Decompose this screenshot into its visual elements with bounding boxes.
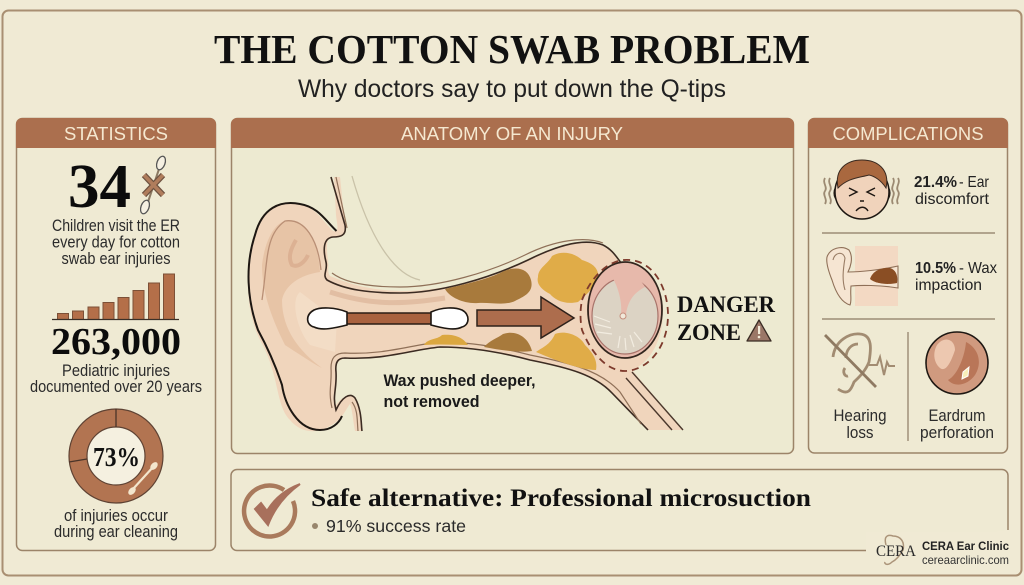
text: children description: every day for cotton	[52, 234, 180, 252]
title: THE COTTON SWAB PROBLEM	[214, 26, 810, 72]
bar chart	[52, 274, 179, 320]
text: pediatric description: documented over 20 years	[30, 378, 202, 396]
eardrum	[588, 262, 662, 358]
heading: complications	[808, 118, 1008, 148]
panel: complications	[808, 118, 1008, 453]
text: success rate: 91% success rate	[326, 516, 466, 536]
panel: anatomy of an injury	[231, 118, 794, 454]
icon: eardrum perforation	[926, 332, 988, 394]
icon: hearing loss	[825, 334, 895, 392]
arrow: pushing direction	[477, 297, 574, 338]
text: pediatric description: Pediatric injuries	[62, 362, 170, 380]
text: hearing loss: Hearing	[834, 407, 886, 425]
donut chart: 73%: 73%	[93, 442, 140, 472]
icon: warning triangle	[747, 320, 771, 341]
text: hearing loss: loss	[846, 424, 874, 442]
donut chart: 73%	[69, 409, 163, 503]
canal walls	[324, 177, 622, 293]
logo: CERA Ear Clinic: CERA	[876, 543, 916, 560]
panel: statistics	[16, 118, 216, 550]
text: ear discomfort: 21.4%	[914, 174, 957, 191]
logo: CERA Ear Clinic	[876, 535, 1009, 567]
text: wax impaction: - Wax	[959, 260, 997, 277]
text: ear cleaning description: of injuries occur	[64, 507, 168, 525]
illustration: ear canal cross-section	[248, 176, 683, 431]
text: wax impaction: 10.5%	[915, 260, 956, 277]
icon: wax impaction	[827, 246, 898, 306]
label: danger zone: DANGER	[677, 292, 775, 317]
icon: crossed-out swab	[139, 155, 167, 215]
panel: safe alternative	[231, 470, 1009, 552]
text: children description: Children visit the ER	[52, 217, 180, 235]
danger zone dashed ring	[580, 260, 668, 371]
text: eardrum perforation: perforation	[920, 424, 994, 442]
label: wax pushed deeper: Wax pushed deeper,	[384, 371, 536, 390]
subtitle: Why doctors say to put down the Q-tips	[298, 75, 726, 103]
stat: 34 children: 34	[68, 153, 131, 221]
heading: statistics	[16, 118, 216, 148]
logo: CERA Ear Clinic: CERA Ear Clinic	[922, 539, 1009, 553]
text: ear discomfort: - Ear	[959, 174, 990, 191]
text: safe alternative heading: Safe alternative: Professional microsuction	[311, 485, 811, 512]
text: ear cleaning description: during ear cleaning	[54, 523, 178, 541]
heading: anatomy	[231, 118, 794, 148]
text: children description: swab ear injuries	[62, 250, 170, 268]
skin wall background	[248, 177, 683, 431]
heading: statistics: STATISTICS	[64, 123, 168, 144]
text: wax impaction: impaction	[915, 277, 982, 294]
icon: face in discomfort	[824, 160, 899, 219]
text: ear discomfort: discomfort	[915, 191, 990, 208]
earwax deposits	[445, 269, 532, 304]
icon: check mark	[244, 484, 300, 537]
text: eardrum perforation: Eardrum	[928, 407, 986, 425]
heading: anatomy: ANATOMY OF AN INJURY	[401, 123, 623, 144]
ear outline	[249, 203, 342, 430]
pinna inner shading	[262, 220, 322, 368]
heading: complications: COMPLICATIONS	[832, 123, 984, 144]
label: danger zone: ZONE	[677, 320, 741, 345]
cotton swab	[308, 308, 468, 329]
logo: CERA Ear Clinic: cereaarclinic.com	[922, 553, 1009, 567]
label: wax pushed deeper: not removed	[384, 392, 480, 411]
stat: 263,000: 263,000	[51, 321, 181, 363]
